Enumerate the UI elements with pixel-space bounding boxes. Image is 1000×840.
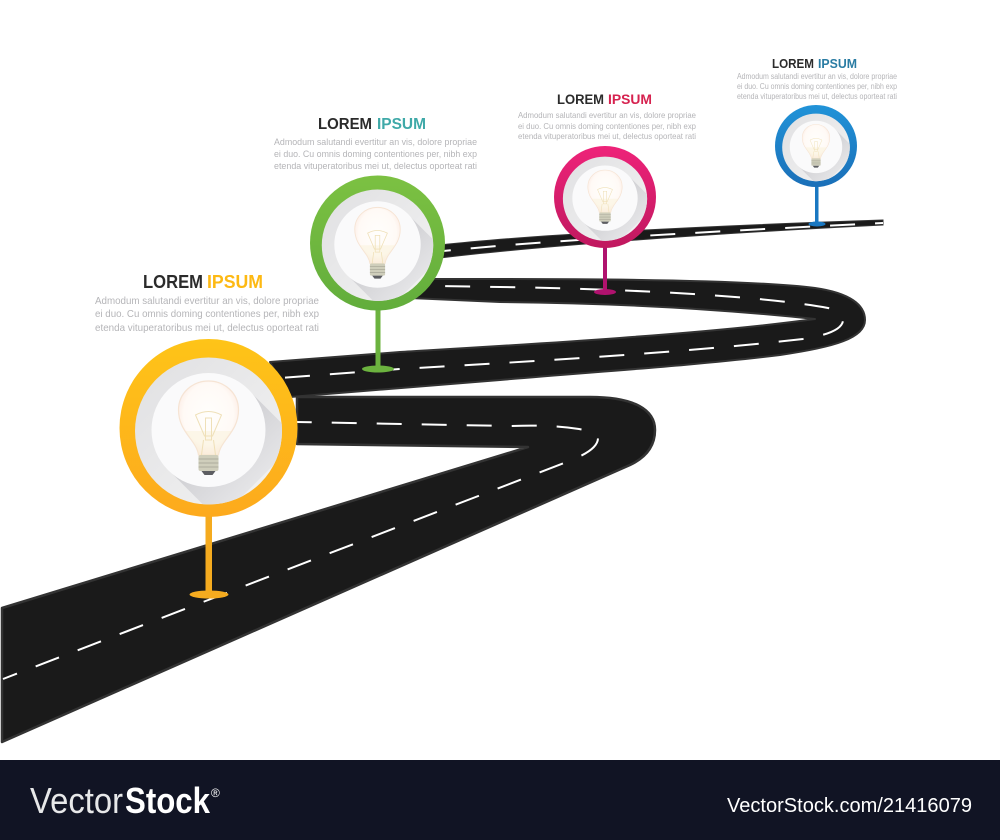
icon: light bulb xyxy=(563,157,657,250)
heading: LOREM xyxy=(318,116,372,133)
body copy: Admodum salutandi evertitur an vis, dolore propriae xyxy=(737,72,897,81)
stem and foot xyxy=(808,184,826,226)
logo: Vector xyxy=(30,780,123,821)
heading xyxy=(772,57,857,71)
text block: yellow xyxy=(95,272,319,334)
body copy: etenda vituperatoribus mei ut, delectus oporteat rati xyxy=(518,131,696,141)
text block: blue xyxy=(737,57,898,101)
text block: green xyxy=(274,116,477,172)
body copy: Admodum salutandi evertitur an vis, dolore propriae xyxy=(95,295,319,307)
image id: VectorStock.com/21416079 xyxy=(727,795,972,817)
heading: LOREM xyxy=(557,92,604,107)
heading: IPSUM xyxy=(608,92,652,107)
heading xyxy=(143,272,263,292)
body copy: Admodum salutandi evertitur an vis, dolore propriae xyxy=(274,137,477,148)
footer bar xyxy=(0,760,1000,840)
ring xyxy=(120,339,298,517)
road: far narrow section xyxy=(440,220,883,258)
pin 4: blue xyxy=(775,105,857,226)
body copy xyxy=(274,137,477,172)
pin 1: yellow xyxy=(120,339,298,598)
heading: IPSUM xyxy=(818,57,857,71)
body copy: ei duo. Cu omnis doming contentiones per, nibh exp xyxy=(95,308,319,320)
icon: light bulb xyxy=(322,190,446,313)
logo xyxy=(30,780,220,821)
body copy: Admodum salutandi evertitur an vis, dolore propriae xyxy=(518,110,696,120)
body copy xyxy=(95,295,319,334)
body copy xyxy=(518,110,696,141)
heading: IPSUM xyxy=(207,272,263,292)
road: S-curve section xyxy=(270,279,865,397)
body copy: etenda vituperatoribus mei ut, delectus oporteat rati xyxy=(274,161,477,172)
body copy: ei duo. Cu omnis doming contentiones per, nibh exp xyxy=(737,82,898,91)
text block: pink xyxy=(518,92,696,141)
ring xyxy=(775,105,857,187)
logo: ® xyxy=(211,786,220,800)
ring xyxy=(310,176,445,310)
winding road xyxy=(2,220,883,742)
road: near wide section xyxy=(2,397,655,742)
heading xyxy=(557,92,652,107)
body copy: etenda vituperatoribus mei ut, delectus oporteat rati xyxy=(737,92,897,101)
heading xyxy=(318,116,426,133)
body copy: etenda vituperatoribus mei ut, delectus oporteat rati xyxy=(95,322,319,334)
stem and foot xyxy=(594,244,616,295)
icon: light bulb xyxy=(782,114,857,188)
icon: light bulb xyxy=(135,358,298,520)
logo: Stock xyxy=(125,780,211,821)
ring xyxy=(554,146,656,248)
heading: LOREM xyxy=(143,272,203,292)
body copy xyxy=(737,72,898,101)
heading: LOREM xyxy=(772,57,814,71)
pin 2: green xyxy=(310,176,446,372)
heading: IPSUM xyxy=(377,116,426,133)
body copy: ei duo. Cu omnis doming contentiones per, nibh exp xyxy=(274,149,477,160)
pin 3: pink xyxy=(554,146,657,295)
body copy: ei duo. Cu omnis doming contentiones per, nibh exp xyxy=(518,121,696,131)
stem and foot xyxy=(362,305,394,372)
stem and foot xyxy=(190,510,228,598)
